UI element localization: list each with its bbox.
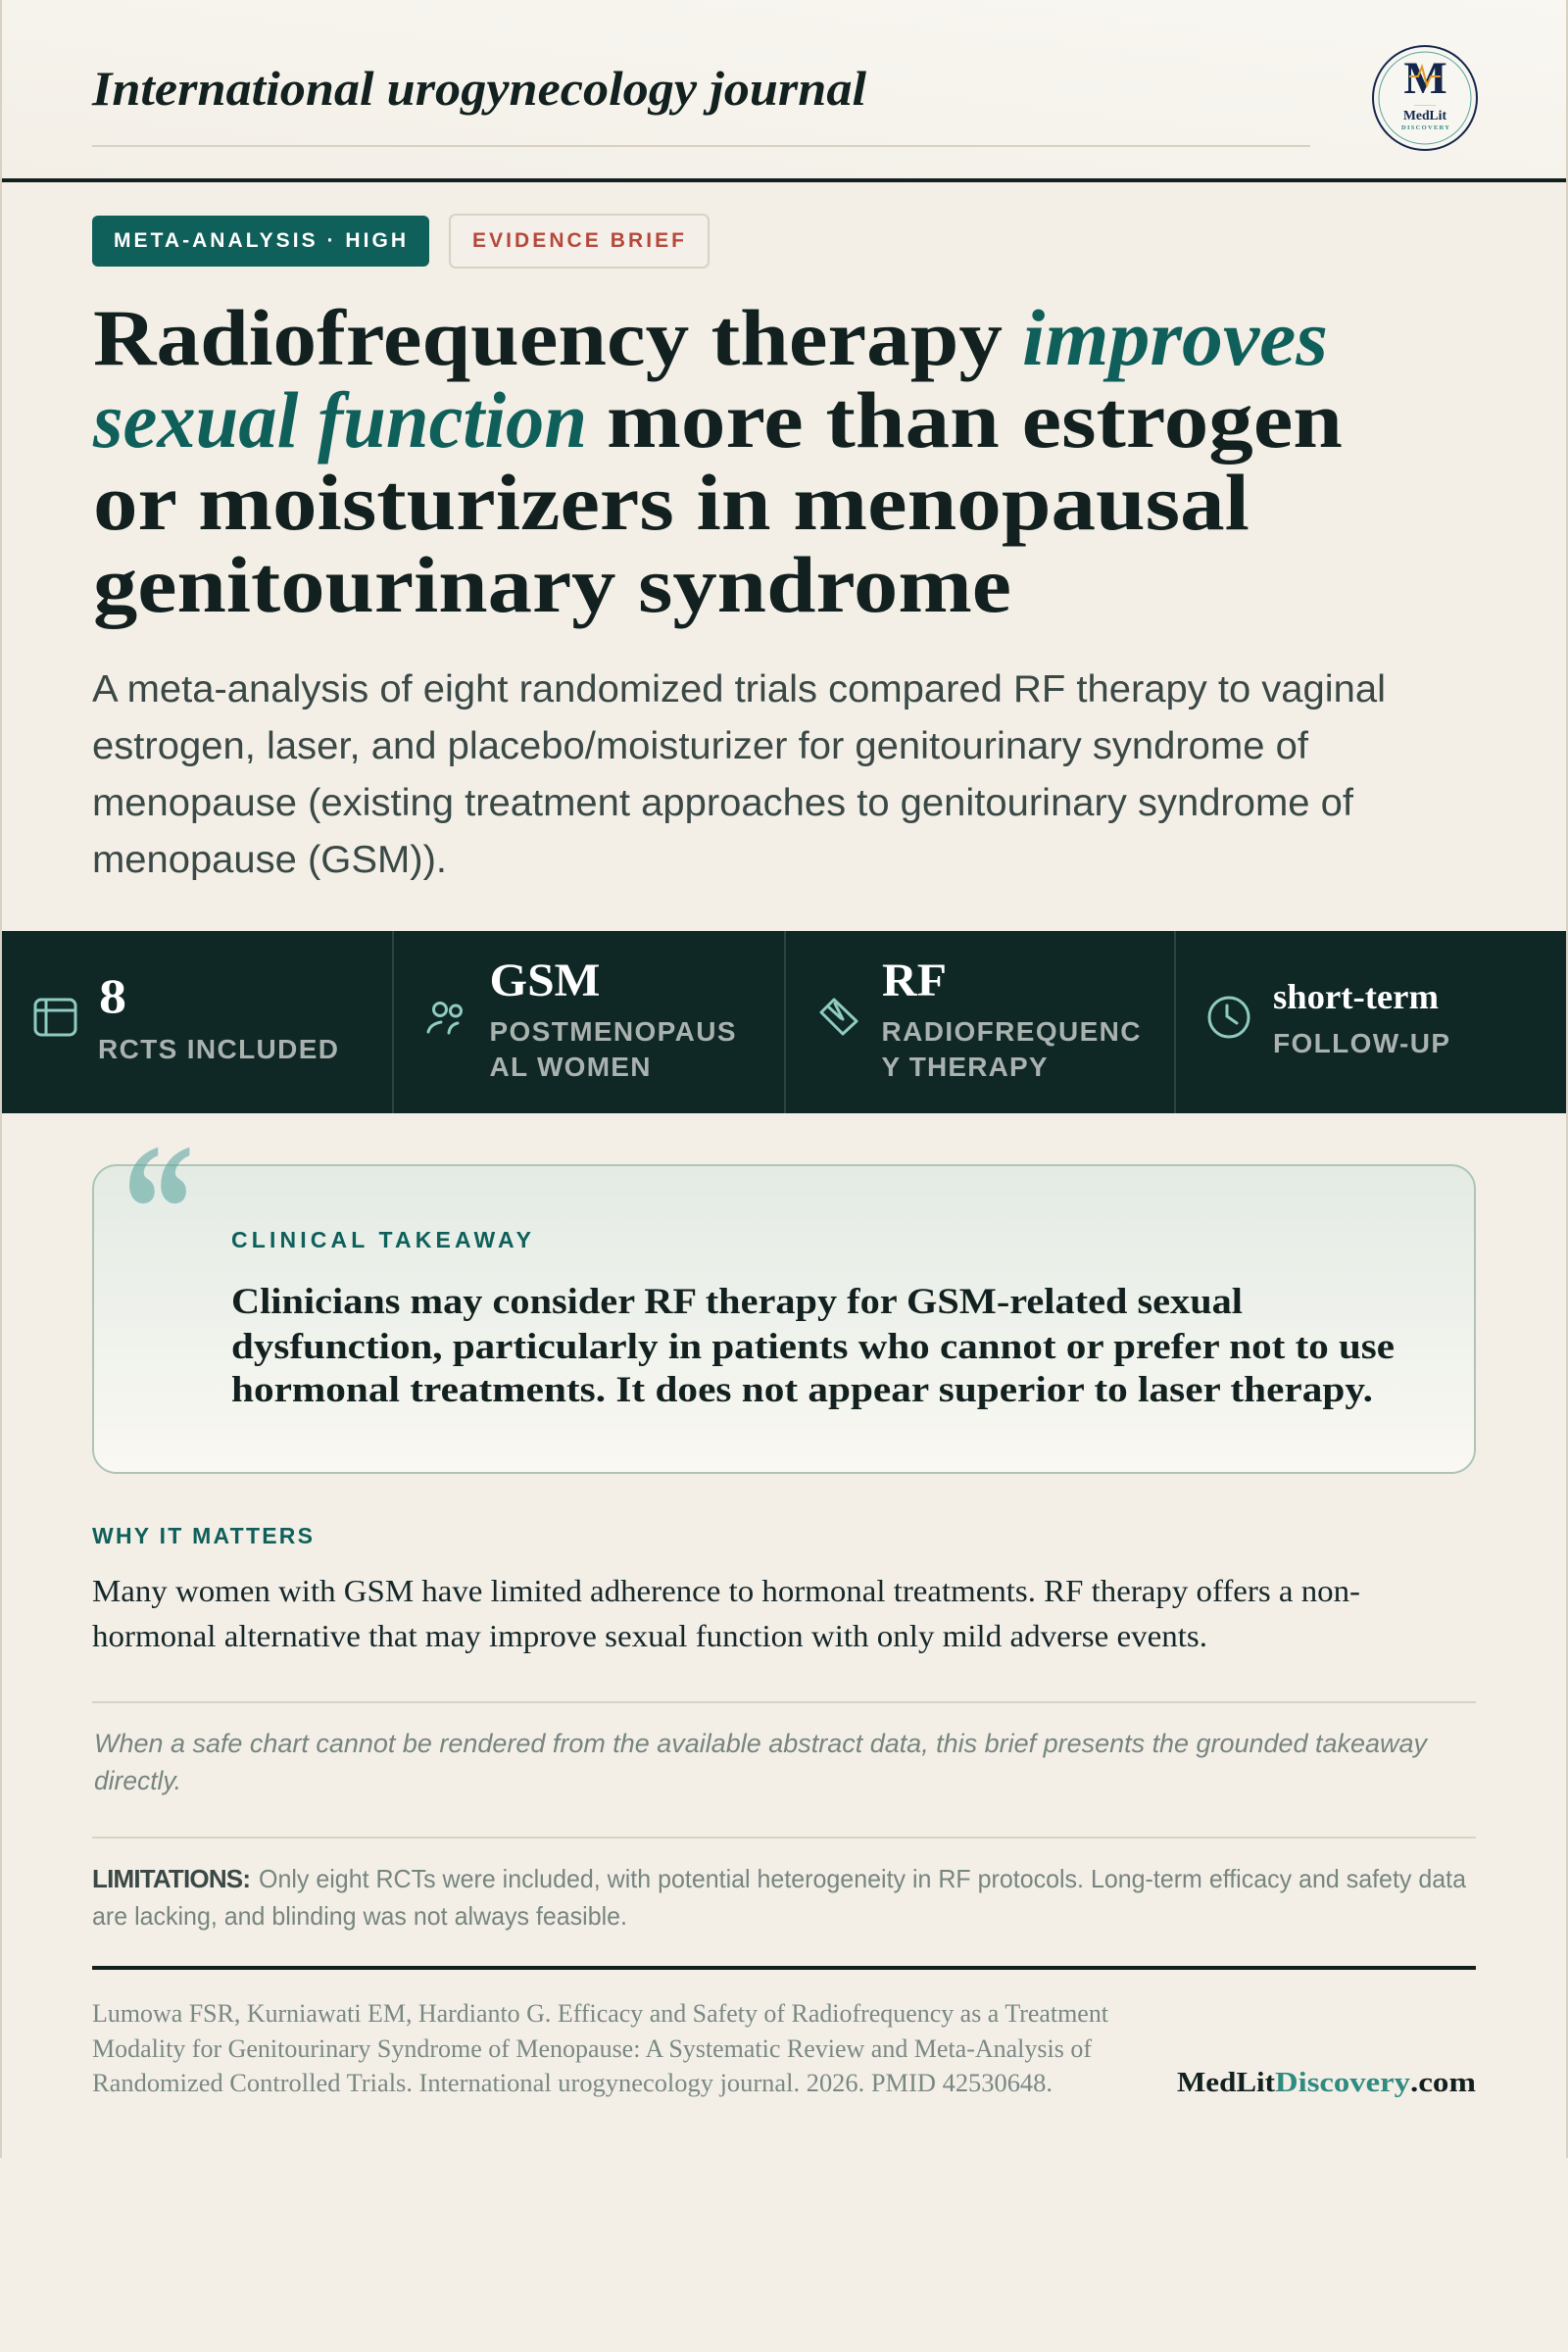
stat: GSM (428, 955, 735, 1082)
logo: MedLit Discovery badge: DISCOVERY (1401, 124, 1449, 131)
subtitle: menopause (GSM)). (92, 839, 447, 881)
headline: more than estrogen (607, 375, 1343, 465)
note: chart unavailable: When a safe chart cannot be rendered from the available abstract data, this brief presents the grounded takeaway (94, 1729, 1428, 1758)
citation: Randomized Controlled Trials. International urogynecology journal. 2026. PMID 42530648. (92, 2068, 1053, 2097)
stat: short-term: FOLLOW-UP (1273, 1028, 1449, 1058)
subtitle: A meta-analysis of eight randomized trials compared RF therapy to vaginal (92, 668, 1386, 710)
icon: quote mark: “ (122, 1105, 194, 1311)
header rule (2, 178, 1566, 182)
stat: 8 RCTs (35, 968, 338, 1064)
icon: people (428, 1004, 461, 1033)
icon: clock (1209, 998, 1249, 1037)
takeaway text: Clinicians may consider RF therapy for GSM-related sexual (231, 1282, 1243, 1322)
stat: short-term (1209, 977, 1449, 1058)
label: clinical takeaway: CLINICAL TAKEAWAY (231, 1227, 531, 1252)
limitations: LIMITATIONS: (92, 1864, 251, 1893)
headline: sexual function (92, 375, 587, 465)
logo: MedLit Discovery badge: MedLit (1403, 109, 1446, 123)
limitations: Only eight RCTs were included, with potential heterogeneity in RF protocols. Long-term efficacy and safety data (259, 1864, 1467, 1893)
footer brand: .com (1410, 2068, 1476, 2098)
takeaway text: dysfunction, particularly in patients who cannot or prefer not to use (231, 1327, 1395, 1367)
icon: table (35, 1000, 75, 1035)
citation (92, 1998, 1109, 2097)
logo: MedLit Discovery badge: M (1403, 53, 1447, 104)
headline: improves (1022, 293, 1328, 382)
footer brand (1177, 2068, 1476, 2098)
stat: 8 RCTs: RCTS INCLUDED (98, 1034, 338, 1064)
citation: Modality for Genitourinary Syndrome of Menopause: A Systematic Review and Meta-Analysis of (92, 2034, 1092, 2063)
header: journal name: International urogynecology journal (91, 61, 866, 116)
citation: Lumowa FSR, Kurniawati EM, Hardianto G. Efficacy and Safety of Radiofrequency as a Treatment (92, 1998, 1109, 2028)
stat: RF (821, 955, 1141, 1082)
stat: GSM: AL WOMEN (490, 1052, 651, 1082)
limitations: are lacking, and blinding was not always feasible. (92, 1901, 627, 1931)
note: chart unavailable: directly. (94, 1766, 181, 1795)
subtitle: menopause (existing treatment approaches to genitourinary syndrome of (92, 782, 1353, 824)
logo: MedLit Discovery badge (1373, 46, 1477, 150)
note: chart unavailable (94, 1729, 1428, 1795)
section: why it matters: hormonal alternative that may improve sexual function with only mild adverse events. (92, 1618, 1207, 1653)
takeaway text (231, 1282, 1395, 1410)
section: why it matters (92, 1523, 1360, 1653)
stat band (2, 931, 1566, 1113)
stat: 8 RCTs: 8 (99, 968, 126, 1023)
stat: GSM: GSM (490, 955, 600, 1006)
stat: RF: Y THERAPY (882, 1052, 1048, 1082)
stat: GSM: POSTMENOPAUS (490, 1016, 735, 1047)
section: why it matters: Many women with GSM have limited adherence to hormonal treatments. RF therapy offers a non- (92, 1573, 1360, 1608)
headline (92, 293, 1343, 629)
stat: short-term: short-term (1273, 977, 1439, 1016)
limitations (92, 1864, 1467, 1931)
section: why it matters: WHY IT MATTERS (92, 1523, 313, 1548)
badge: evidence brief: EVIDENCE BRIEF (472, 229, 684, 252)
panel: clinical takeaway (93, 1105, 1475, 1473)
headline: or moisturizers in menopausal (93, 458, 1250, 547)
badge: evidence brief (450, 215, 709, 268)
icon: ruler (821, 1000, 857, 1034)
stat: RF: RADIOFREQUENC (882, 1016, 1141, 1047)
footer brand: MedLit (1177, 2068, 1276, 2098)
badge: meta-analysis high: META-ANALYSIS · HIGH (114, 229, 406, 252)
badge: meta-analysis high (92, 216, 429, 267)
headline: genitourinary syndrome (93, 540, 1011, 629)
headline: Radiofrequency therapy (93, 293, 1003, 382)
subtitle: estrogen, laser, and placebo/moisturizer for genitourinary syndrome of (92, 725, 1308, 767)
footer brand: Discovery (1275, 2068, 1410, 2098)
takeaway text: hormonal treatments. It does not appear superior to laser therapy. (231, 1370, 1373, 1410)
subtitle (92, 668, 1386, 881)
stat: RF: RF (882, 955, 947, 1006)
